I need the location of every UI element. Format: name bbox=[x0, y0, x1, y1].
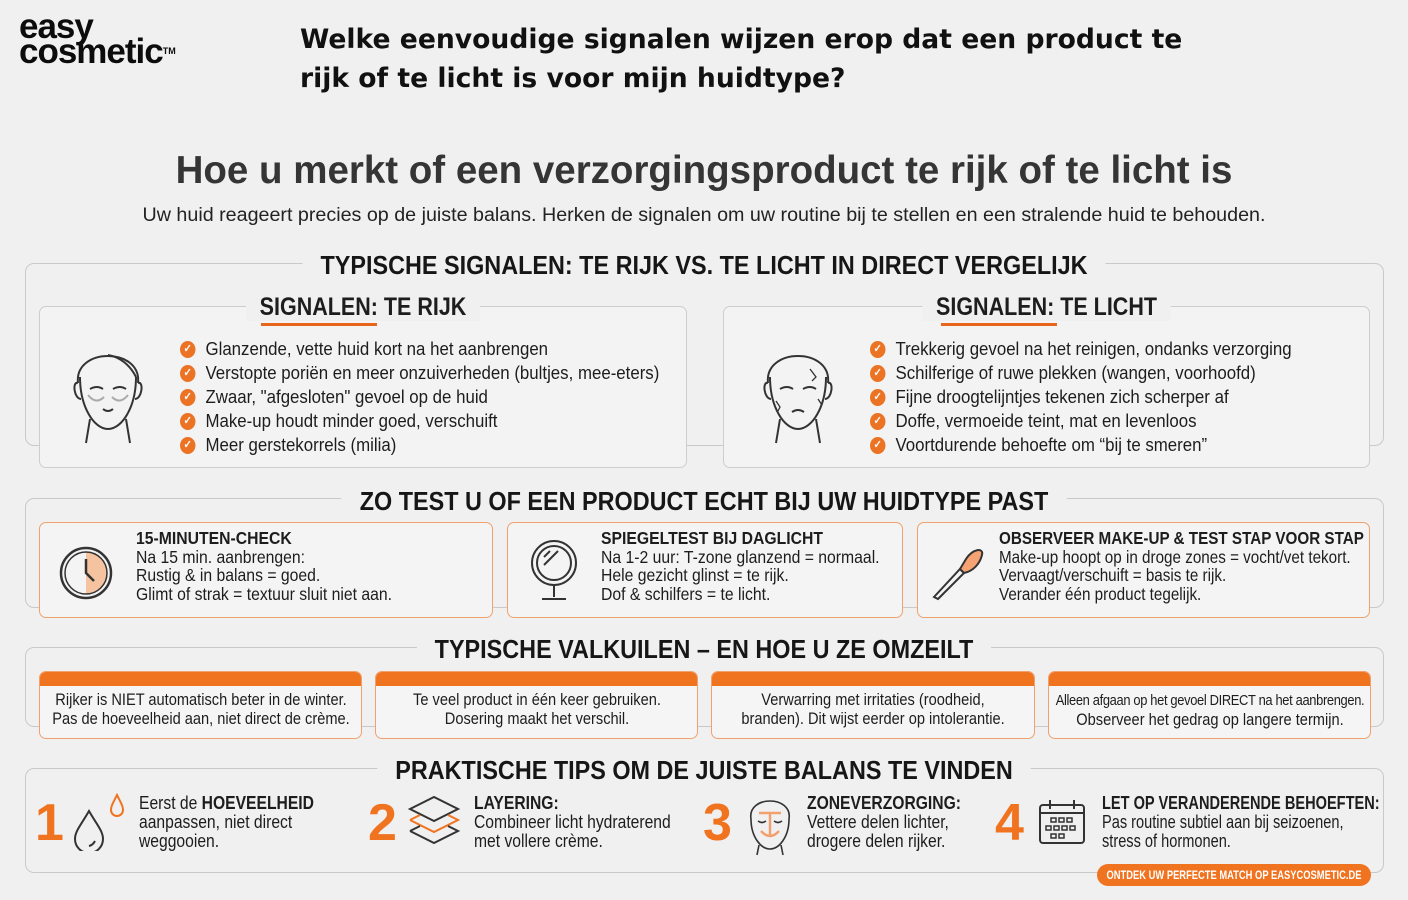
card: 15 minuten check: Rustig & in balans = goed. bbox=[136, 565, 320, 585]
card: 15 minuten check bbox=[39, 522, 493, 618]
section: test bbox=[25, 486, 1384, 618]
card: observeer make-up: Verander één product tegelijk. bbox=[999, 584, 1201, 604]
pitfall 1: Pas de hoeveelheid aan, niet direct de crème. bbox=[52, 708, 349, 728]
section heading: zo test u: ZO TEST U OF EEN PRODUCT ECHT BIJ UW HUIDTYPE PAST bbox=[360, 486, 1048, 516]
tip 2: LAYERING: bbox=[474, 793, 559, 813]
cta button bbox=[1097, 864, 1371, 886]
section: tips bbox=[25, 755, 1384, 886]
panel heading: te licht: SIGNALEN: TE LICHT bbox=[936, 293, 1157, 321]
tip 1 bbox=[35, 793, 314, 852]
icon: clock bbox=[60, 546, 112, 600]
card: observeer make-up: Vervaagt/verschuift = basis te rijk. bbox=[999, 565, 1226, 585]
icon: face oily bbox=[73, 354, 143, 444]
tip 1: weggooien. bbox=[139, 831, 219, 851]
section heading: valkuilen: TYPISCHE VALKUILEN – EN HOE U ZE OMZEILT bbox=[435, 634, 973, 664]
tip 4: Pas routine subtiel aan bij seizoenen, bbox=[1102, 812, 1344, 832]
question title bbox=[300, 24, 1182, 94]
bullets: te rijk: Verstopte poriën en meer onzuiverheden (bultjes, mee-eters) bbox=[205, 362, 659, 383]
card: 15 minuten check: Glimt of strak = textuur sluit niet aan. bbox=[136, 584, 392, 604]
bullets: te licht: Fijne droogtelijntjes tekenen zich scherper af bbox=[895, 386, 1229, 407]
bullets: te rijk: Zwaar, "afgesloten" gevoel op de huid bbox=[205, 386, 488, 407]
icon: layers bbox=[408, 796, 460, 844]
icon: brush bbox=[932, 549, 984, 600]
icon: drops bbox=[74, 793, 124, 851]
card: observeer make-up bbox=[917, 522, 1370, 618]
bullets: te rijk: Make-up houdt minder goed, verschuift bbox=[205, 410, 497, 431]
card: observeer make-up: OBSERVEER MAKE-UP & TEST STAP VOOR STAP bbox=[999, 528, 1364, 548]
card: spiegeltest: Na 1-2 uur: T-zone glanzend = normaal. bbox=[601, 546, 880, 566]
tip 4: 4 bbox=[995, 794, 1024, 852]
card: spiegeltest bbox=[507, 522, 903, 618]
tip 3: Vettere delen lichter, bbox=[807, 812, 949, 832]
bullets: te rijk: Meer gerstekorrels (milia) bbox=[205, 434, 396, 455]
logo: easy bbox=[19, 7, 93, 46]
tip 4 bbox=[995, 793, 1380, 852]
section: signalen vergelijk bbox=[25, 250, 1384, 468]
section heading: typische signalen: TYPISCHE SIGNALEN: TE RIJK VS. TE LICHT IN DIRECT VERGELIJK bbox=[320, 250, 1088, 280]
bullets: te licht: Voortdurende behoefte om “bij te smeren” bbox=[895, 434, 1207, 455]
bullets: te licht: Doffe, vermoeide teint, mat en levenloos bbox=[895, 410, 1197, 431]
card: spiegeltest: Hele gezicht glinst = te rijk. bbox=[601, 565, 789, 585]
logo: cosmeticTM bbox=[19, 32, 176, 71]
tip 4: LET OP VERANDERENDE BEHOEFTEN: bbox=[1102, 793, 1380, 813]
pitfall 3: Verwarring met irritaties (roodheid, bbox=[761, 690, 985, 709]
tip 2: met vollere crème. bbox=[474, 831, 603, 851]
panel: te rijk bbox=[39, 306, 687, 468]
pitfall 3: branden). Dit wijst eerder op intolerantie. bbox=[741, 708, 1005, 728]
tip 3 bbox=[703, 793, 961, 856]
card: 15 minuten check: 15-MINUTEN-CHECK bbox=[136, 528, 292, 548]
pitfall 2: Dosering maakt het verschil. bbox=[444, 708, 629, 728]
question title: Welke eenvoudige signalen wijzen erop dat een product te bbox=[300, 24, 1182, 55]
section heading: tips: PRAKTISCHE TIPS OM DE JUISTE BALANS TE VINDEN bbox=[395, 755, 1013, 785]
tip 3: drogere delen rijker. bbox=[807, 831, 945, 851]
card: spiegeltest: SPIEGELTEST BIJ DAGLICHT bbox=[601, 528, 823, 548]
icon: face zones bbox=[750, 800, 790, 856]
panel: te licht bbox=[723, 306, 1370, 468]
main heading: Hoe u merkt of een verzorgingsproduct te rijk of te licht is bbox=[176, 149, 1232, 192]
question title: rijk of te licht is voor mijn huidtype? bbox=[300, 63, 845, 94]
card: 15 minuten check: Na 15 min. aanbrengen: bbox=[136, 546, 305, 566]
bullets: te licht bbox=[870, 338, 1292, 455]
panel heading: te rijk: SIGNALEN: TE RIJK bbox=[260, 293, 466, 321]
cta button: ONTDEK UW PERFECTE MATCH OP EASYCOSMETIC.DE bbox=[1107, 868, 1361, 882]
tip 4: stress of hormonen. bbox=[1102, 831, 1231, 851]
section: valkuilen bbox=[25, 634, 1384, 739]
tip 3: ZONEVERZORGING: bbox=[807, 793, 961, 813]
tip 1: Eerst de HOEVEELHEID bbox=[139, 793, 314, 813]
logo bbox=[19, 7, 176, 71]
pitfall 1: Rijker is NIET automatisch beter in de winter. bbox=[55, 690, 346, 709]
bullets: te licht: Trekkerig gevoel na het reinigen, ondanks verzorging bbox=[895, 338, 1292, 359]
card: observeer make-up: Make-up hoopt op in droge zones = vocht/vet tekort. bbox=[999, 546, 1351, 566]
icon: face dry bbox=[763, 355, 833, 444]
pitfall 4: Alleen afgaan op het gevoel DIRECT na het aanbrengen. bbox=[1055, 692, 1364, 709]
tip 2: 2 bbox=[368, 794, 397, 852]
icon: mirror bbox=[531, 540, 577, 600]
pitfall 4 bbox=[1048, 671, 1371, 739]
icon: calendar bbox=[1039, 800, 1085, 844]
pitfall 2: Te veel product in één keer gebruiken. bbox=[413, 690, 660, 709]
tip 1: 1 bbox=[35, 794, 64, 852]
pitfall 4: Observeer het gedrag op langere termijn. bbox=[1076, 710, 1343, 728]
bullets: te rijk bbox=[180, 338, 659, 455]
tip 1: aanpassen, niet direct bbox=[139, 812, 292, 832]
card: spiegeltest: Dof & schilfers = te licht. bbox=[601, 584, 770, 604]
bullets: te rijk: Glanzende, vette huid kort na het aanbrengen bbox=[205, 338, 548, 359]
tip 2: Combineer licht hydraterend bbox=[474, 812, 671, 832]
subtitle: Uw huid reageert precies op de juiste balans. Herken de signalen om uw routine bij te stellen en een stralende huid te behouden. bbox=[143, 204, 1265, 226]
pitfall 1 bbox=[39, 671, 362, 739]
pitfall 3 bbox=[711, 671, 1035, 739]
tip 3: 3 bbox=[703, 794, 732, 852]
pitfall 2 bbox=[375, 671, 698, 739]
tip 2 bbox=[368, 793, 671, 852]
bullets: te licht: Schilferige of ruwe plekken (wangen, voorhoofd) bbox=[895, 362, 1256, 383]
